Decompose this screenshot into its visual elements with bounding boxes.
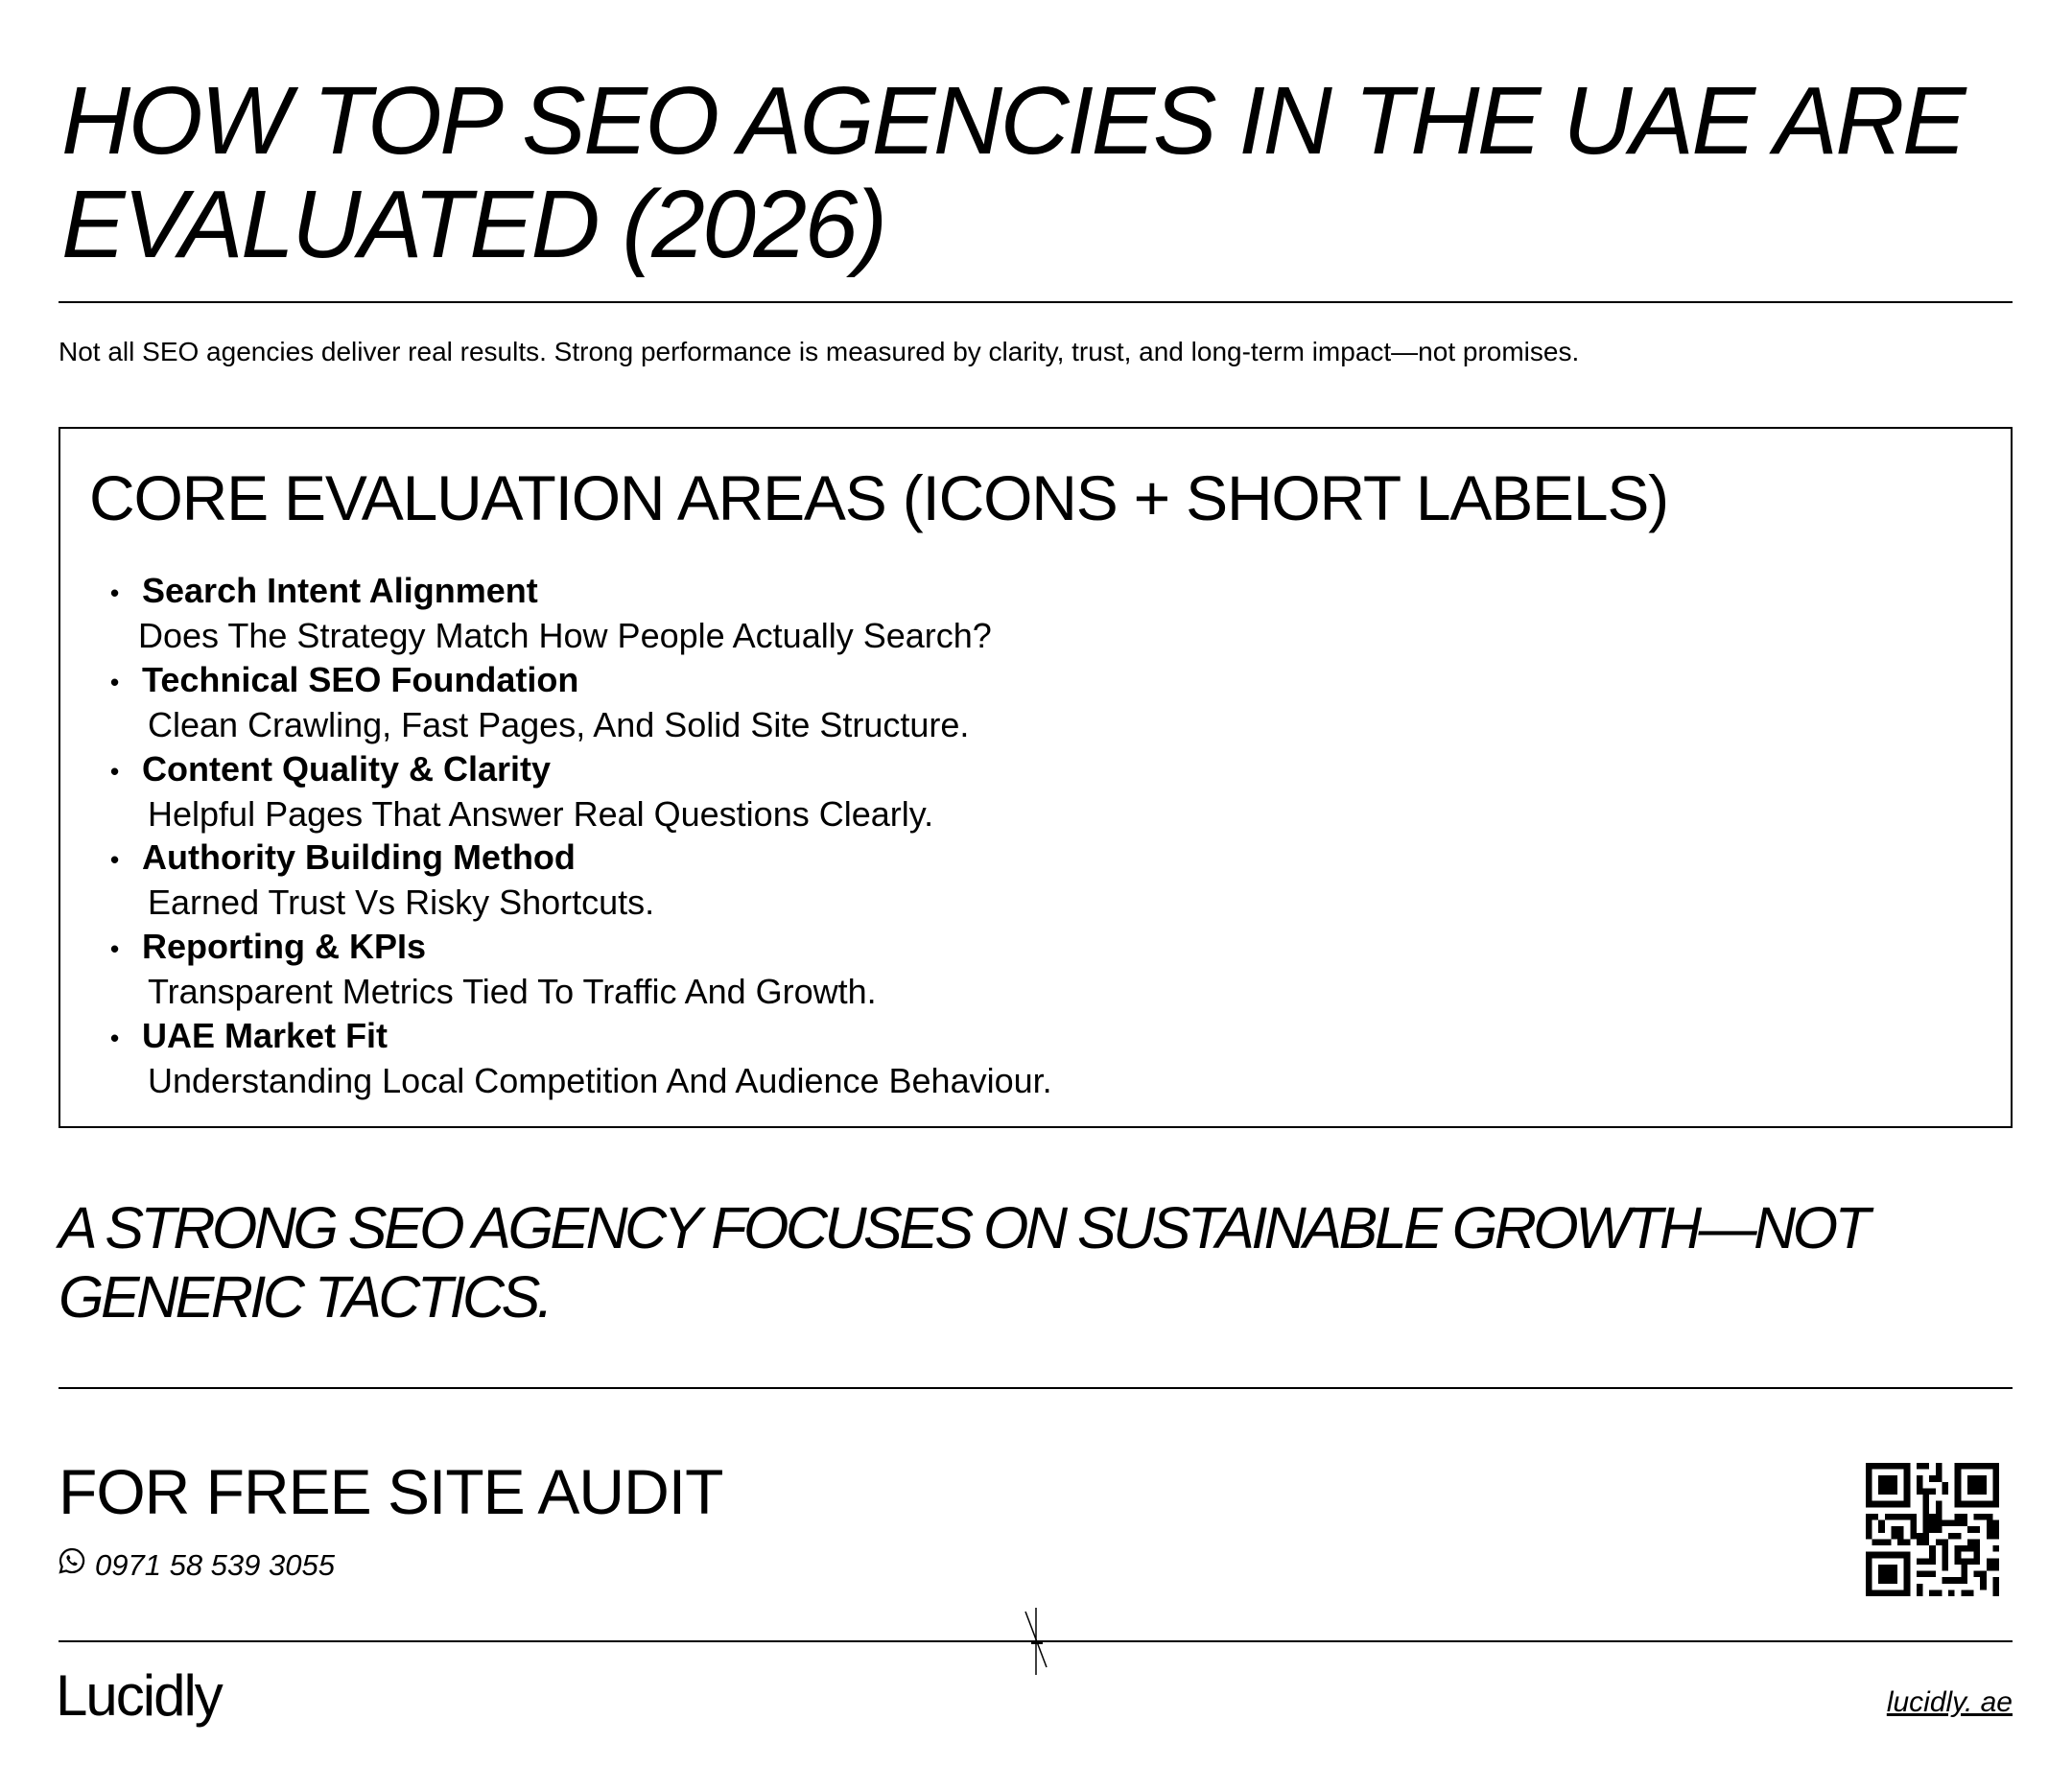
list of evaluation areas: Understanding Local Competition And Audience Behaviour.: [148, 1061, 1052, 1100]
list of evaluation areas: •: [110, 845, 119, 874]
title: EVALUATED (2026): [61, 171, 885, 278]
list of evaluation areas: Clean Crawling, Fast Pages, And Solid Site Structure.: [148, 705, 969, 744]
subtitle: Not all SEO agencies deliver real results. Strong performance is measured by clarity, trust, and long-term impact—not promises.: [59, 337, 1579, 366]
logo: Lucidly: [56, 1663, 222, 1728]
icon: whatsapp: [59, 1548, 84, 1573]
list of evaluation areas: •: [110, 757, 119, 786]
CTA heading: FOR FREE SITE AUDIT: [59, 1456, 722, 1527]
list of evaluation areas: Technical SEO Foundation: [142, 660, 578, 699]
QR code: [1866, 1463, 1999, 1596]
list of evaluation areas: •: [110, 578, 119, 607]
list of evaluation areas: Transparent Metrics Tied To Traffic And Growth.: [148, 972, 877, 1011]
list of evaluation areas: Helpful Pages That Answer Real Questions Clearly.: [148, 794, 933, 834]
list of evaluation areas: Search Intent Alignment: [142, 571, 538, 610]
panel heading: CORE EVALUATION AREAS (ICONS + SHORT LABELS): [89, 462, 1668, 533]
list of evaluation areas: •: [110, 1024, 119, 1052]
quote: GENERIC TACTICS.: [59, 1264, 550, 1330]
list of evaluation areas: Reporting & KPIs: [142, 927, 426, 966]
title: [61, 67, 1967, 278]
list of evaluation areas: Content Quality & Clarity: [142, 749, 551, 789]
text: 0971 58 539 3055: [95, 1548, 335, 1582]
list of evaluation areas: Does The Strategy Match How People Actually Search?: [138, 616, 992, 655]
list of evaluation areas: Earned Trust Vs Risky Shortcuts.: [148, 883, 654, 922]
phone contact: [59, 1548, 336, 1582]
panel: core evaluation areas: [59, 427, 2013, 1128]
list of evaluation areas: Authority Building Method: [142, 837, 576, 877]
list of evaluation areas: [110, 571, 1052, 1100]
quote: A STRONG SEO AGENCY FOCUSES ON SUSTAINABLE GROWTH—NOT: [59, 1195, 1867, 1260]
icon: cross mark: [1024, 1608, 1048, 1675]
list of evaluation areas: •: [110, 934, 119, 963]
quote: [56, 1195, 1874, 1330]
website link: lucidly. ae: [1887, 1686, 2013, 1718]
list of evaluation areas: UAE Market Fit: [142, 1016, 388, 1055]
title: HOW TOP SEO AGENCIES IN THE UAE ARE: [61, 67, 1964, 175]
list of evaluation areas: •: [110, 668, 119, 696]
